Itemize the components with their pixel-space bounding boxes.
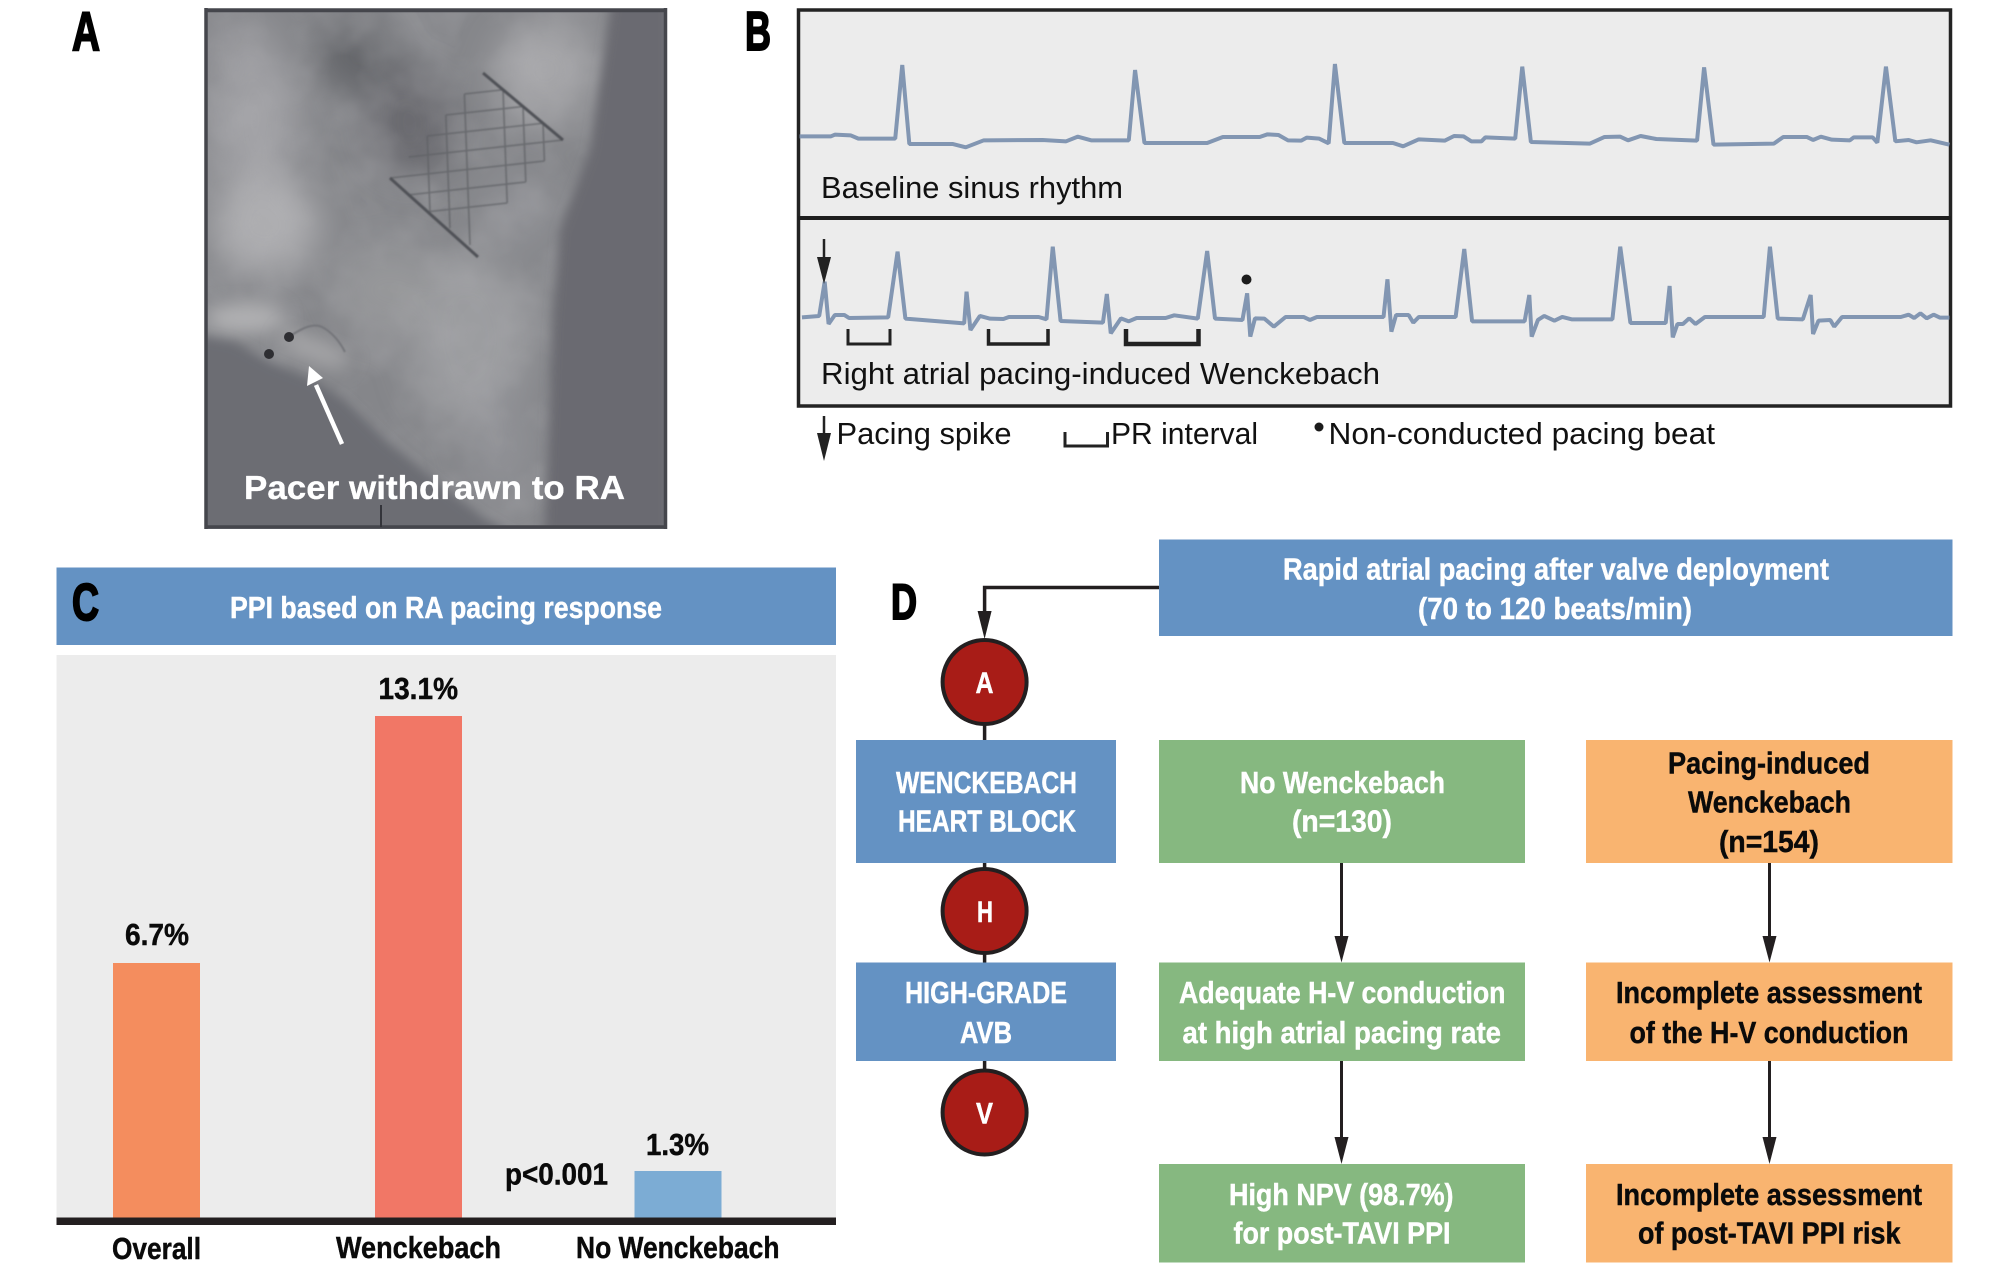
green column: NPV box: for post-TAVI PPI: [1234, 1216, 1450, 1250]
axis labels: Overall: [112, 1231, 201, 1266]
panel label: A: A: [72, 0, 100, 62]
AHV column: Wenckebach heart block box: WENCKEBACH: [896, 765, 1077, 800]
panel C: bar chart: [56, 655, 836, 1266]
arrow: orange row 1 to 2: [1762, 863, 1776, 962]
arrow: green row 1 to 2: [1334, 863, 1348, 962]
arrow: green row 2 to 3: [1334, 1061, 1348, 1164]
green column: H-V conduction box: Adequate H-V conduction: [1179, 975, 1506, 1010]
bar: No Wenckebach 1.3%: [634, 1127, 722, 1218]
green column: H-V conduction box: [1159, 962, 1525, 1061]
icon: valve stent: [390, 73, 563, 257]
AHV column: Wenckebach heart block box: [856, 740, 1116, 863]
orange column: incomplete PPI risk box: [1586, 1164, 1952, 1262]
legend: PR interval: PR interval: [1111, 416, 1258, 451]
panel C: header: [56, 568, 836, 645]
flowchart: top box: Rapid atrial pacing after valve deployment: [1283, 552, 1829, 586]
legend: pacing spike: Pacing spike: [836, 416, 1012, 451]
AHV column: high-grade AVB box: HIGH-GRADE: [905, 975, 1067, 1010]
arrow: orange row 2 to 3: [1762, 1061, 1776, 1164]
panel label: B: B: [745, 0, 771, 62]
arrow: pacing spike marker: [817, 239, 831, 284]
axis labels: No Wenckebach: [576, 1230, 780, 1265]
strip label: baseline: Baseline sinus rhythm: [821, 170, 1123, 205]
green column: no Wenckebach box: (n=130): [1292, 804, 1392, 838]
chart title: PPI based on RA pacing response: [230, 590, 662, 625]
legend: pacing spike: [817, 416, 1012, 461]
green column: no Wenckebach box: [1159, 740, 1525, 863]
panel label: C: C: [72, 574, 99, 632]
arrow: pointing at pacer: [307, 366, 342, 444]
p value: p<0.001: [505, 1156, 608, 1192]
circle: A: [943, 640, 1027, 724]
green column: no Wenckebach box: No Wenckebach: [1240, 765, 1445, 800]
circle: V: [943, 1070, 1027, 1154]
circle: H: [943, 869, 1027, 953]
AHV column: high-grade AVB box: AVB: [960, 1015, 1012, 1050]
flowchart: top box: (70 to 120 beats/min): [1418, 591, 1692, 626]
bar: No Wenckebach 1.3%: 1.3%: [646, 1127, 709, 1162]
PR interval brackets: [848, 329, 1198, 344]
green column: H-V conduction box: at high atrial pacing rate: [1182, 1015, 1501, 1050]
circle: V: V: [976, 1098, 993, 1130]
image caption: Pacer withdrawn to RA: [244, 469, 625, 506]
orange column: incomplete H-V box: [1586, 962, 1952, 1061]
orange column: pacing-induced Wenckebach box: (n=154): [1719, 824, 1819, 859]
panel B: ECG strips: [798, 10, 1951, 406]
orange column: pacing-induced Wenckebach box: [1586, 740, 1952, 863]
legend: non-conducted pacing beat: Non-conducted pacing beat: [1328, 416, 1715, 451]
AHV column: high-grade AVB box: [856, 962, 1116, 1061]
green column: NPV box: [1159, 1164, 1525, 1262]
ECG trace: baseline sinus rhythm: [800, 64, 1949, 147]
panel label: D: D: [891, 574, 917, 630]
axis labels: Wenckebach: [336, 1230, 501, 1265]
bar: overall 6.7%: [113, 917, 200, 1218]
green column: NPV box: High NPV (98.7%): [1229, 1177, 1454, 1212]
panel A: fluoroscopy image: [195, 0, 670, 545]
circle: H: H: [977, 896, 993, 929]
ECG trace: pacing-induced Wenckebach: [802, 247, 1949, 337]
AHV column: Wenckebach heart block box: HEART BLOCK: [898, 804, 1076, 838]
circle: A: A: [976, 667, 994, 700]
orange column: incomplete H-V box: of the H-V conduction: [1630, 1015, 1908, 1050]
axis labels: [112, 1230, 780, 1266]
orange column: pacing-induced Wenckebach box: Pacing-induced: [1668, 746, 1870, 780]
flowchart: top box: [1159, 540, 1952, 636]
bar: Wenckebach 13.1%: 13.1%: [378, 671, 458, 706]
orange column: pacing-induced Wenckebach box: Wenckebach: [1688, 784, 1851, 820]
legend: ECG symbols: [817, 416, 1715, 461]
icon: pacing lead markers: [264, 325, 345, 359]
bar: overall 6.7%: 6.7%: [125, 917, 189, 952]
orange column: incomplete H-V box: Incomplete assessment: [1616, 975, 1922, 1010]
non-conducted beat dot: [1242, 274, 1252, 284]
connector: top box to AHV column: [978, 588, 1159, 1080]
orange column: incomplete PPI risk box: of post-TAVI PPI risk: [1638, 1216, 1901, 1250]
strip label: Wenckebach: Right atrial pacing-induced Wenckebach: [821, 356, 1380, 391]
orange column: incomplete PPI risk box: Incomplete assessment: [1616, 1177, 1922, 1212]
bar: Wenckebach 13.1%: [375, 671, 462, 1218]
